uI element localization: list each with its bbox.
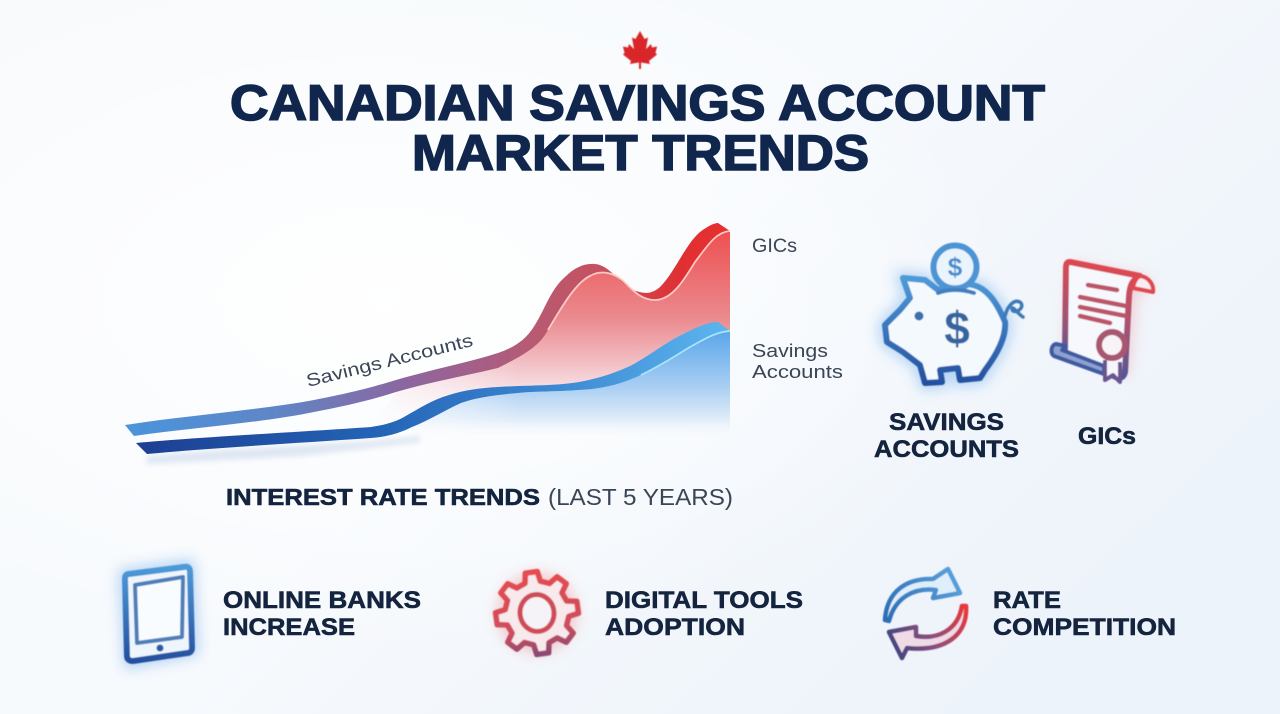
icon: GIC certificate	[1052, 262, 1153, 382]
chart legend: savings accounts: Savings	[752, 340, 828, 361]
GICs ribbon line	[125, 223, 730, 436]
seal ribbon	[1105, 360, 1120, 382]
bottom arrow	[889, 606, 966, 658]
icon: tablet	[125, 566, 192, 662]
scroll curl	[1133, 276, 1153, 292]
label: savings accounts: SAVINGS	[889, 409, 1004, 436]
rotated chart label: Savings Accounts	[304, 330, 475, 391]
chart legend: savings accounts: Accounts	[752, 361, 843, 382]
ribbon shadow	[147, 436, 420, 464]
icon: maple leaf	[623, 31, 657, 69]
red area fill	[396, 232, 730, 406]
text: online banks increase	[223, 587, 421, 641]
blue area fill	[420, 332, 730, 428]
text: digital tools adoption	[605, 587, 803, 641]
chart legend: savings accounts	[752, 340, 843, 382]
chart caption: (LAST 5 YEARS)	[548, 484, 733, 510]
area chart: interest rate trends	[125, 223, 730, 464]
coin slot	[938, 290, 974, 293]
text: online banks increase: INCREASE	[223, 614, 355, 641]
dollar sign: $	[944, 302, 970, 354]
label: GICs: GICs	[1078, 423, 1136, 450]
label: savings accounts	[874, 409, 1019, 463]
chart caption: INTEREST RATE TRENDS	[226, 484, 540, 510]
scroll base	[1052, 344, 1104, 374]
text: rate competition: COMPETITION	[993, 614, 1176, 641]
icon: piggy bank with coin	[885, 246, 1023, 383]
savings ribbon line	[136, 322, 730, 454]
infographic canvas	[81, 30, 1175, 674]
pig eye	[914, 312, 924, 320]
icon: rate competition arrows	[885, 569, 966, 658]
top arrow	[885, 569, 960, 621]
title	[230, 75, 1045, 181]
tablet screen	[135, 577, 183, 643]
label: savings accounts: ACCOUNTS	[874, 436, 1019, 463]
gear hub	[518, 592, 556, 634]
chart legend: GICs: GICs	[752, 236, 797, 257]
tablet button	[156, 644, 164, 652]
text: digital tools adoption: DIGITAL TOOLS	[605, 587, 803, 614]
title: MARKET TRENDS	[412, 125, 869, 181]
text: rate competition: RATE	[993, 587, 1061, 614]
certificate text lines	[1080, 285, 1126, 323]
pig tail	[1005, 301, 1023, 317]
text: digital tools adoption: ADOPTION	[605, 614, 745, 641]
text: online banks increase: ONLINE BANKS	[223, 587, 421, 614]
icon: gear	[491, 567, 583, 659]
coin: $	[948, 252, 963, 282]
text: rate competition	[993, 587, 1176, 641]
title: CANADIAN SAVINGS ACCOUNT	[230, 75, 1045, 131]
chart caption	[226, 484, 733, 510]
seal	[1099, 332, 1125, 358]
